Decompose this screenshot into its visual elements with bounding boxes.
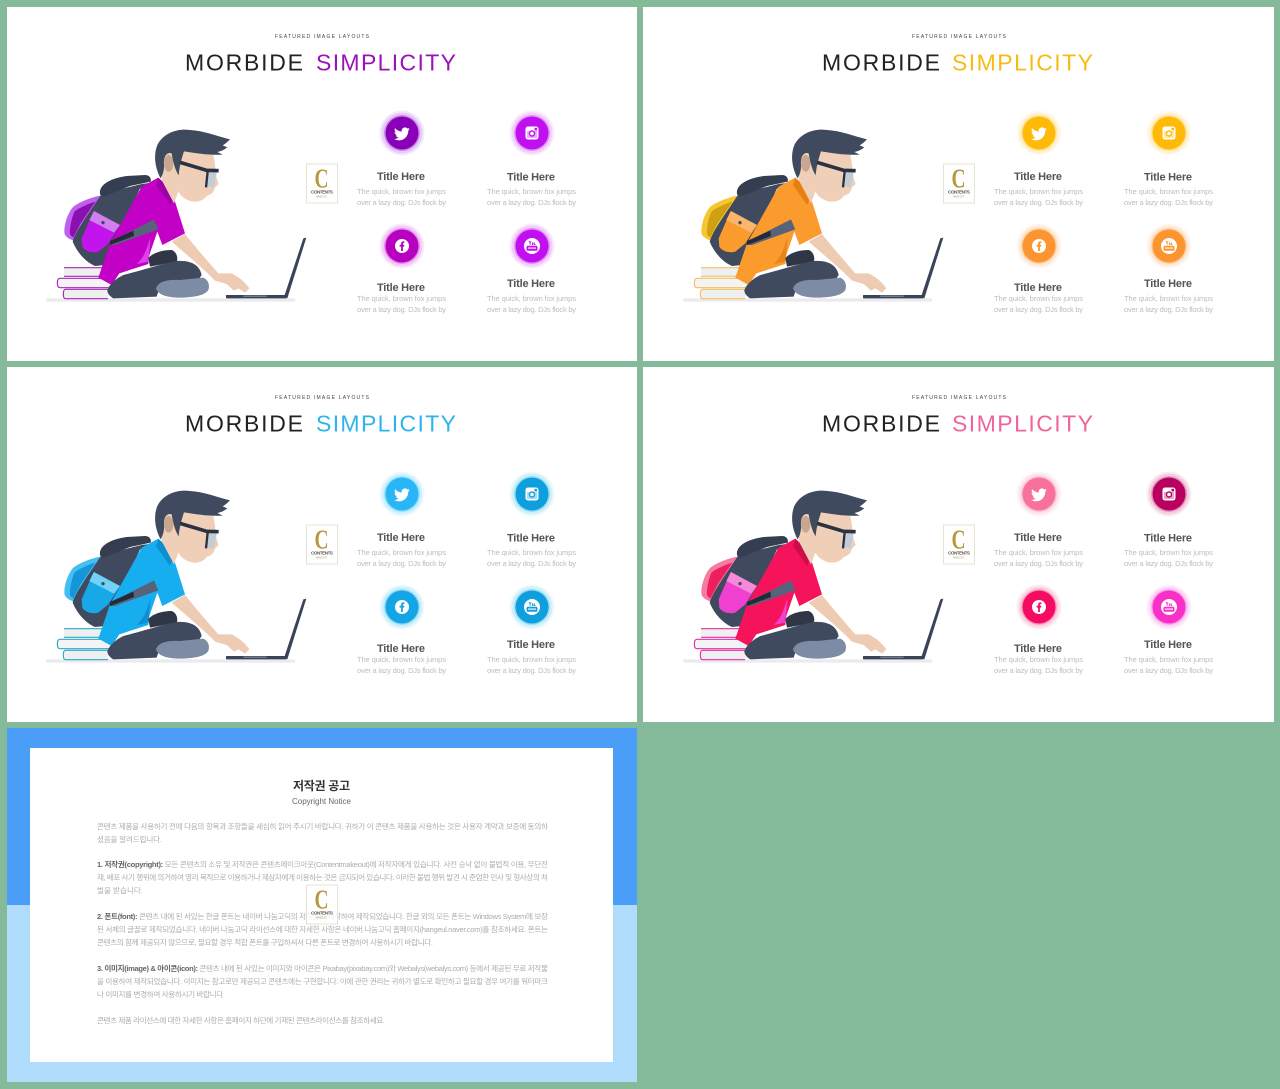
text block: instagram: over a lazy dog. DJs flock by xyxy=(487,559,576,568)
title: MORBIDE xyxy=(185,50,303,76)
text block: twitter: over a lazy dog. DJs flock by xyxy=(994,559,1083,568)
text block: youtube: The quick, brown fox jumps xyxy=(1124,655,1213,664)
icon: instagram xyxy=(1146,472,1192,516)
text block: facebook: Title Here xyxy=(377,282,425,294)
text block: youtube: The quick, brown fox jumps xyxy=(487,655,576,664)
text block: instagram: Title Here xyxy=(1144,532,1192,544)
text block: twitter: The quick, brown fox jumps xyxy=(994,187,1083,196)
logo watermark xyxy=(306,525,338,564)
clause 3: image and icon: 3. 이미지(image) & 아이콘(icon): 콘텐츠 내에 된 사있는 이미지와 아이콘은 Pixabay(pixabay.com)와 Webalys(webalys.com) 등에서 제공된 무료 저작물 xyxy=(97,963,548,973)
notice title: 저작권 공고 xyxy=(293,778,350,793)
intro paragraph xyxy=(97,821,548,844)
text block: youtube: Title Here xyxy=(1144,278,1192,290)
title accent: SIMPLICITY xyxy=(952,410,1093,436)
logo watermark xyxy=(944,525,974,564)
clause 3: image and icon xyxy=(97,963,548,999)
logo watermark: MAKE OUT xyxy=(316,916,327,920)
text block: facebook: The quick, brown fox jumps xyxy=(994,294,1083,303)
text block: twitter: The quick, brown fox jumps xyxy=(357,187,446,196)
title accent: SIMPLICITY xyxy=(952,50,1093,76)
text block: twitter: The quick, brown fox jumps xyxy=(994,548,1083,557)
logo watermark: MAKE OUT xyxy=(316,556,327,560)
text block: twitter: Title Here xyxy=(377,171,425,183)
text block: instagram: over a lazy dog. DJs flock by xyxy=(1124,198,1213,207)
text block: twitter: over a lazy dog. DJs flock by xyxy=(994,198,1083,207)
clause 3: image and icon: 나 이미지를 변경하여 사용하시기 바랍니다. xyxy=(97,989,225,999)
icon: facebook xyxy=(1016,584,1062,630)
text block: instagram: The quick, brown fox jumps xyxy=(1124,548,1213,557)
panel: copyright notice xyxy=(7,728,637,1082)
icon: twitter xyxy=(1016,110,1062,156)
icon: instagram xyxy=(510,110,554,156)
logo watermark xyxy=(306,164,338,203)
text block: twitter: over a lazy dog. DJs flock by xyxy=(357,559,446,568)
icon: instagram xyxy=(1146,110,1192,156)
text block: youtube: over a lazy dog. DJs flock by xyxy=(487,666,576,675)
text block: facebook xyxy=(994,643,1083,675)
text block: facebook xyxy=(357,282,446,314)
illustration: student with laptop xyxy=(683,491,943,663)
text block: youtube: The quick, brown fox jumps xyxy=(487,294,576,303)
text block: instagram xyxy=(1124,532,1213,568)
logo watermark xyxy=(306,885,338,924)
text block: facebook: Title Here xyxy=(1014,643,1062,655)
text block: twitter: over a lazy dog. DJs flock by xyxy=(357,198,446,207)
logo watermark: C xyxy=(951,165,966,194)
text block: instagram: The quick, brown fox jumps xyxy=(1124,187,1213,196)
panel: blue slide xyxy=(7,367,637,722)
icon: instagram xyxy=(510,472,554,516)
clause 2: font: 된 서체의 글꼴로 제작되었습니다. 네이버 나눔고딕 라이선스에 대한 자세한 사항은 네이버 나눔고딕 홈페이지(hangeul.naver.com)를 참조하세요. 폰트는 xyxy=(97,924,548,934)
text block: twitter xyxy=(357,532,446,568)
text block: facebook: The quick, brown fox jumps xyxy=(357,655,446,664)
icon: twitter xyxy=(1016,472,1062,516)
text block: facebook: over a lazy dog. DJs flock by xyxy=(994,305,1083,314)
panel: orange slide xyxy=(643,7,1274,361)
closing line: 콘텐츠 제품 라이선스에 대한 자세한 사항은 홈페이지 하단에 기재된 콘텐츠라이선스를 참조하세요. xyxy=(97,1015,385,1025)
kicker: FEATURED IMAGE LAYOUTS xyxy=(912,34,1007,40)
panel: purple slide xyxy=(7,7,637,361)
kicker: FEATURED IMAGE LAYOUTS xyxy=(275,395,370,401)
text block: instagram xyxy=(487,172,576,207)
text block: instagram: over a lazy dog. DJs flock by xyxy=(487,198,576,207)
icon: facebook xyxy=(1016,224,1062,268)
clause 2: font: 콘텐츠의 함께 제공되지 않으므로, 필요할 경우 적합 폰트를 구입하셔서 다른 폰트로 변경하여 사용하시기 바랍니다. xyxy=(97,937,433,947)
kicker: FEATURED IMAGE LAYOUTS xyxy=(912,395,1007,401)
text block: facebook: The quick, brown fox jumps xyxy=(994,655,1083,664)
text block: twitter xyxy=(994,532,1083,568)
logo watermark: C xyxy=(951,526,966,555)
text block: youtube: Title Here xyxy=(1144,639,1192,651)
text block: youtube xyxy=(1124,639,1213,675)
logo watermark: MAKE OUT xyxy=(316,194,327,198)
text block: instagram: Title Here xyxy=(1144,172,1192,184)
logo watermark: CONTENTS xyxy=(948,550,970,556)
logo watermark: CONTENTS xyxy=(311,550,333,556)
text block: instagram xyxy=(487,532,576,568)
logo watermark: CONTENTS xyxy=(948,190,970,194)
text block: youtube: Title Here xyxy=(507,639,555,651)
text block: facebook: over a lazy dog. DJs flock by xyxy=(994,666,1083,675)
text block: facebook: over a lazy dog. DJs flock by xyxy=(357,666,446,675)
text block: twitter: The quick, brown fox jumps xyxy=(357,548,446,557)
text block: twitter xyxy=(994,171,1083,207)
icon: youtube xyxy=(510,584,554,630)
logo watermark: MAKE OUT xyxy=(953,194,964,198)
text block: twitter: Title Here xyxy=(1014,532,1062,544)
text block: youtube: Title Here xyxy=(507,278,555,290)
illustration: student with laptop xyxy=(46,491,306,663)
logo watermark: C xyxy=(314,886,329,915)
text block: youtube: The quick, brown fox jumps xyxy=(1124,294,1213,303)
icon: youtube xyxy=(1146,584,1192,630)
logo watermark xyxy=(944,164,974,203)
text block: instagram: The quick, brown fox jumps xyxy=(487,187,576,196)
title accent: SIMPLICITY xyxy=(316,50,456,76)
text block: youtube: over a lazy dog. DJs flock by xyxy=(1124,305,1213,314)
text block: facebook: The quick, brown fox jumps xyxy=(357,294,446,303)
text block: youtube xyxy=(1124,278,1213,314)
text block: instagram xyxy=(1124,172,1213,207)
icon: facebook xyxy=(380,584,424,630)
text block: facebook xyxy=(994,282,1083,314)
panel: pink slide xyxy=(643,367,1274,722)
clause 1: copyright: 1. 저작권(copyright): 모든 콘텐츠의 소유 및 저작권은 콘텐츠메이크아웃(Contentmakeout)에 저작자에게 있습니다. 사전 승낙 없이 불법적 이용, 무단전 xyxy=(97,859,548,869)
title: MORBIDE xyxy=(822,410,940,436)
text block: twitter: Title Here xyxy=(377,532,425,544)
text block: facebook: Title Here xyxy=(377,643,425,655)
clause 3: image and icon: 을 이용하여 제작되었습니다. 이미지는 참고로만 제공되고 콘텐츠에는 구현합니다. 이에 관한 권리는 귀하가 별도로 확인하고 필요할 경우 여기를 워터마크 xyxy=(97,976,548,986)
title: MORBIDE xyxy=(822,50,940,76)
clause 2: font: 2. 폰트(font): 콘텐츠 내에 된 서있는 한글 폰트는 네이버 나눔고딕의 저작물로 제작하여 제작되었습니다. 한글 외의 모든 폰트는 Windows System에 보장 xyxy=(97,911,548,921)
text block: youtube: over a lazy dog. DJs flock by xyxy=(1124,666,1213,675)
icon: youtube xyxy=(510,224,554,268)
logo watermark: MAKE OUT xyxy=(953,556,964,560)
text block: instagram: Title Here xyxy=(507,172,555,184)
text block: facebook xyxy=(357,643,446,675)
illustration: student with laptop xyxy=(683,130,943,302)
intro paragraph: 콘텐츠 제품을 사용하기 전에 다음의 항목과 조항들을 세심히 읽어 주시기 바랍니다. 귀하가 이 콘텐츠 제품을 사용하는 것은 사용자 계약과 보증에 동의하 xyxy=(97,821,548,831)
text block: instagram: over a lazy dog. DJs flock by xyxy=(1124,559,1213,568)
intro paragraph: 셨음을 알려드립니다. xyxy=(97,834,162,844)
logo watermark: CONTENTS xyxy=(311,910,333,916)
logo watermark: C xyxy=(314,165,329,194)
icon: youtube xyxy=(1146,224,1192,268)
text block: twitter xyxy=(357,171,446,207)
text block: instagram: The quick, brown fox jumps xyxy=(487,548,576,557)
icon: twitter xyxy=(380,472,424,516)
title accent: SIMPLICITY xyxy=(316,410,456,436)
kicker: FEATURED IMAGE LAYOUTS xyxy=(275,34,370,40)
text block: twitter: Title Here xyxy=(1014,171,1062,183)
illustration: student with laptop xyxy=(46,130,306,302)
icon: facebook xyxy=(380,224,424,268)
text block: youtube: over a lazy dog. DJs flock by xyxy=(487,305,576,314)
text block: facebook: Title Here xyxy=(1014,282,1062,294)
clause 1: copyright: 벌을 받습니다. xyxy=(97,885,143,895)
icon: twitter xyxy=(380,110,424,156)
text block: youtube xyxy=(487,278,576,314)
clause 1: copyright: 재, 배포 사기 행위에 의거하여 영리 목적으로 이용하거나 제삼자에게 이용하는 것은 금지되어 있습니다. 이러한 불법 행위 발견 시 준엄한 민사 및 형사상의 처 xyxy=(97,872,548,882)
notice subtitle: Copyright Notice xyxy=(292,797,352,806)
text block: youtube xyxy=(487,639,576,675)
text block: instagram: Title Here xyxy=(507,532,555,544)
text block: facebook: over a lazy dog. DJs flock by xyxy=(357,305,446,314)
title: MORBIDE xyxy=(185,410,303,436)
clause 1: copyright xyxy=(97,859,548,895)
logo watermark: C xyxy=(314,526,329,555)
clause 2: font xyxy=(97,911,548,947)
logo watermark: CONTENTS xyxy=(311,190,333,194)
